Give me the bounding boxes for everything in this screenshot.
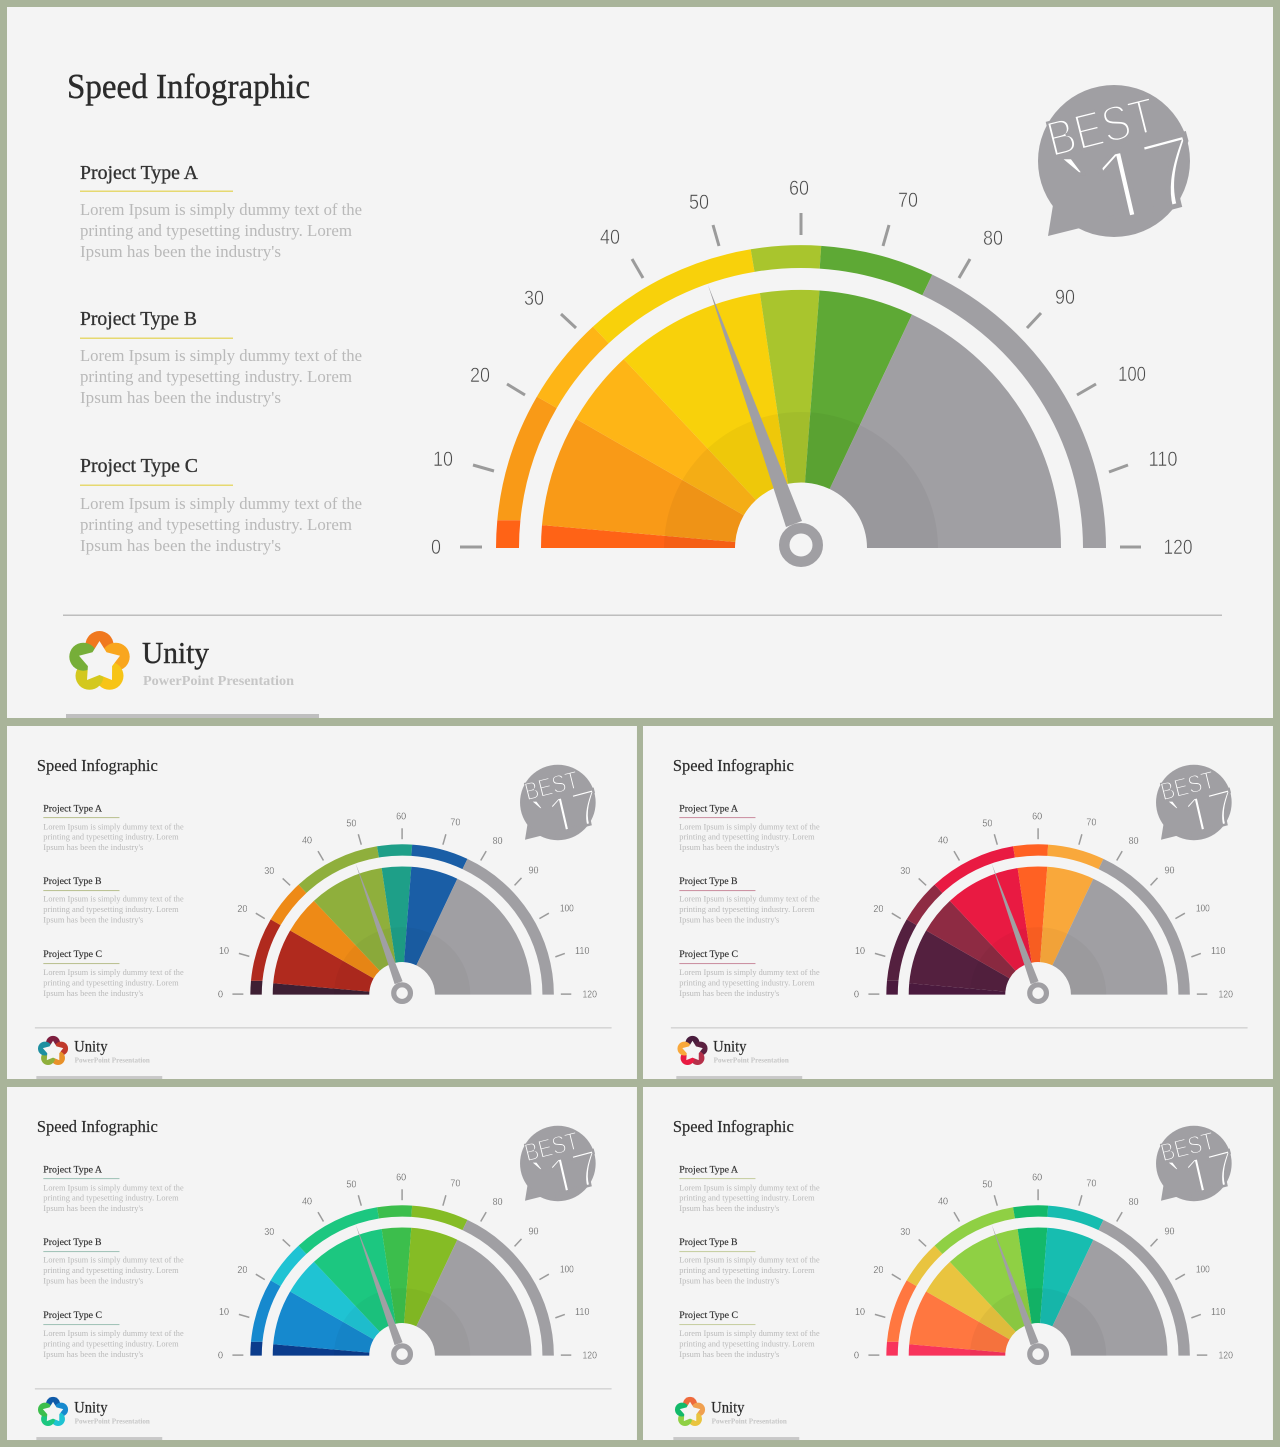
scale numbers: 70 <box>1086 817 1096 828</box>
scale numbers: 50 <box>346 818 356 829</box>
scale numbers: 80 <box>493 836 503 847</box>
text block: Project Type B: Project Type B <box>679 1237 738 1248</box>
text block: Project Type C: Ipsum has been the industry's <box>43 988 143 998</box>
text block: Project Type A: Project Type A <box>679 1164 739 1175</box>
panel: small slide 2 (plum, red, amber) <box>643 726 1273 1079</box>
scale numbers: 10 <box>219 1307 229 1318</box>
text block: Project Type A: Project Type A <box>43 803 103 814</box>
text block: Project Type A: Ipsum has been the industry's <box>43 1203 143 1213</box>
text block: Project Type A: printing and typesetting industry. Lorem <box>679 1193 815 1203</box>
icon: BEST 17 speech bubble <box>1038 85 1212 263</box>
scale numbers: 80 <box>1129 836 1139 847</box>
icon: BEST 17 speech bubble: 1 <box>1178 785 1220 848</box>
text block: Project Type A: Project Type A <box>43 1164 103 1175</box>
text block: Project Type C <box>679 949 820 998</box>
gauge: speedometer <box>218 811 597 1001</box>
scale numbers: 0 <box>218 990 223 1001</box>
scale numbers: 20 <box>470 364 490 387</box>
brand name: Unity <box>74 1039 108 1056</box>
text block: Project Type B: Project Type B <box>43 876 102 887</box>
needle <box>356 1225 410 1362</box>
text block: Project Type C <box>43 949 184 998</box>
scale numbers: 80 <box>493 1197 503 1208</box>
scale numbers: 40 <box>302 836 312 847</box>
text block: Project Type A: Lorem Ipsum is simply dummy text of the <box>679 821 820 831</box>
scale numbers: 30 <box>900 866 910 877</box>
title: Speed Infographic <box>67 67 310 106</box>
text block: Project Type A: Project Type A <box>80 162 199 184</box>
text block: Project Type A: Ipsum has been the industry's <box>679 842 779 852</box>
text block: Project Type A: Ipsum has been the industry's <box>679 1203 779 1213</box>
text block: Project Type B <box>679 876 820 925</box>
text block: Project Type C: Lorem Ipsum is simply dummy text of the <box>43 967 184 977</box>
scale numbers: 100 <box>560 1265 574 1276</box>
logo: Unity star <box>677 1036 708 1065</box>
text block: Project Type C <box>80 455 362 555</box>
logo: Unity star <box>38 1397 68 1426</box>
scale numbers: 110 <box>575 946 590 957</box>
text block: Project Type C: printing and typesetting industry. Lorem <box>80 515 352 534</box>
scale numbers: 20 <box>873 904 884 915</box>
text block: Project Type C: printing and typesetting industry. Lorem <box>679 978 815 988</box>
text block: Project Type B <box>43 1237 184 1286</box>
scale numbers: 90 <box>1164 1226 1175 1237</box>
text block: Project Type A: printing and typesetting industry. Lorem <box>80 221 352 240</box>
scale numbers: 0 <box>854 1351 859 1362</box>
scale numbers: 120 <box>1218 990 1233 1001</box>
text block: Project Type C: printing and typesetting industry. Lorem <box>43 1339 179 1349</box>
text block: Project Type C: Lorem Ipsum is simply dummy text of the <box>679 967 820 977</box>
text block: Project Type A: Ipsum has been the industry's <box>43 842 143 852</box>
scale numbers: 30 <box>264 1227 274 1238</box>
scale numbers <box>431 177 1192 559</box>
text block: Project Type B <box>80 308 362 407</box>
text block: Project Type C <box>679 1310 820 1359</box>
text block: Project Type C: printing and typesetting industry. Lorem <box>679 1339 815 1349</box>
scale numbers: 120 <box>582 1351 597 1362</box>
logo: Unity star <box>675 1397 705 1426</box>
text block: Project Type C: Ipsum has been the industry's <box>679 1349 779 1359</box>
text block: Project Type B: Ipsum has been the industry's <box>43 915 143 925</box>
text block: Project Type C: Ipsum has been the industry's <box>43 1349 143 1359</box>
text block: Project Type B: Lorem Ipsum is simply dummy text of the <box>80 346 362 365</box>
scale numbers <box>854 811 1233 1001</box>
icon: BEST 17 speech bubble <box>1156 765 1243 853</box>
scale numbers: 0 <box>431 536 441 559</box>
text block: Project Type C: Lorem Ipsum is simply dummy text of the <box>43 1328 184 1338</box>
text block: Project Type A: Lorem Ipsum is simply dummy text of the <box>679 1182 820 1192</box>
scale numbers: 110 <box>1211 1307 1226 1318</box>
text block: Project Type C: Lorem Ipsum is simply dummy text of the <box>679 1328 820 1338</box>
icon: BEST 17 speech bubble: ` <box>1164 792 1183 853</box>
brand tagline: PowerPoint Presentation <box>712 1418 787 1426</box>
text block: Project Type B: Lorem Ipsum is simply dummy text of the <box>679 1255 820 1265</box>
icon: BEST 17 speech bubble: 1 <box>542 1146 584 1209</box>
text block: Project Type A: printing and typesetting industry. Lorem <box>43 1193 179 1203</box>
icon: BEST 17 speech bubble: BEST <box>1041 87 1161 168</box>
scale numbers: 90 <box>528 865 539 876</box>
brand tagline: PowerPoint Presentation <box>714 1057 789 1065</box>
outer ring segments <box>250 1205 554 1356</box>
brand tagline: PowerPoint Presentation <box>75 1057 150 1065</box>
scale numbers: 70 <box>450 817 460 828</box>
icon: BEST 17 speech bubble <box>1156 1126 1243 1214</box>
text block: Project Type B: printing and typesetting industry. Lorem <box>80 367 352 386</box>
inner fan segments <box>909 1227 1167 1356</box>
text block: Project Type C <box>43 1310 184 1359</box>
scale numbers: 100 <box>1118 363 1146 386</box>
inner fan segments <box>541 290 1061 548</box>
scale numbers: 50 <box>346 1179 356 1190</box>
scale ticks <box>232 828 571 994</box>
text block: Project Type B: Lorem Ipsum is simply dummy text of the <box>679 894 820 904</box>
scale numbers: 110 <box>575 1307 590 1318</box>
needle <box>708 285 818 562</box>
scale numbers: 60 <box>1032 811 1042 822</box>
scale numbers: 40 <box>938 1197 948 1208</box>
scale numbers: 10 <box>433 448 453 471</box>
text block: Project Type B: Ipsum has been the industry's <box>679 915 779 925</box>
inner fan segments <box>909 866 1167 995</box>
scale numbers: 120 <box>1164 536 1192 559</box>
scale numbers: 70 <box>898 189 918 212</box>
title: Speed Infographic <box>673 756 794 775</box>
text block: Project Type B: Ipsum has been the industry's <box>43 1276 143 1286</box>
text block: Project Type B: Lorem Ipsum is simply dummy text of the <box>43 894 184 904</box>
text block: Project Type B: printing and typesetting industry. Lorem <box>43 1265 179 1275</box>
brand name: Unity <box>142 635 209 670</box>
needle <box>992 864 1046 1001</box>
brand name: Unity <box>711 1400 745 1417</box>
text block: Project Type C: Project Type C <box>43 1310 102 1321</box>
text block: Project Type B: printing and typesetting industry. Lorem <box>43 904 179 914</box>
gauge: speedometer <box>854 1172 1233 1362</box>
scale numbers: 110 <box>1211 946 1226 957</box>
outer ring segments <box>250 844 554 995</box>
inner fan segments <box>273 1227 531 1356</box>
gauge: speedometer <box>218 1172 597 1362</box>
scale numbers: 110 <box>1148 448 1178 471</box>
icon: BEST 17 speech bubble: BEST <box>522 1128 582 1167</box>
scale numbers: 40 <box>302 1197 312 1208</box>
scale numbers: 10 <box>219 946 229 957</box>
scale numbers: 50 <box>982 1179 992 1190</box>
scale numbers: 20 <box>237 1265 248 1276</box>
scale numbers <box>218 811 597 1001</box>
scale numbers: 80 <box>1129 1197 1139 1208</box>
scale numbers: 90 <box>1055 286 1075 309</box>
scale numbers: 60 <box>1032 1172 1042 1183</box>
text block: Project Type C: Project Type C <box>43 949 102 960</box>
text block: Project Type A: Lorem Ipsum is simply dummy text of the <box>80 200 362 219</box>
text block: Project Type C: Lorem Ipsum is simply dummy text of the <box>80 494 362 513</box>
text block: Project Type C: Project Type C <box>679 949 738 960</box>
text block: Project Type A: printing and typesetting industry. Lorem <box>43 832 179 842</box>
title: Speed Infographic <box>37 756 158 775</box>
text block: Project Type B: Project Type B <box>679 876 738 887</box>
outer ring segments <box>886 844 1190 995</box>
icon: BEST 17 speech bubble: ` <box>1164 1153 1183 1214</box>
scale numbers: 80 <box>983 227 1003 250</box>
icon: BEST 17 speech bubble: ` <box>528 1153 547 1214</box>
scale numbers: 120 <box>1218 1351 1233 1362</box>
scale numbers: 50 <box>982 818 992 829</box>
icon: BEST 17 speech bubble: ` <box>528 792 547 853</box>
logo: Unity star <box>69 631 130 690</box>
scale numbers: 50 <box>689 191 709 214</box>
icon: BEST 17 speech bubble: BEST <box>522 767 582 806</box>
text block: Project Type B <box>679 1237 820 1286</box>
scale numbers <box>854 1172 1233 1362</box>
brand tagline: PowerPoint Presentation <box>75 1418 150 1426</box>
text block: Project Type C: Ipsum has been the industry's <box>679 988 779 998</box>
text block: Project Type A <box>679 1164 820 1213</box>
scale numbers: 70 <box>450 1178 460 1189</box>
scale numbers: 40 <box>938 836 948 847</box>
gauge: speedometer <box>431 177 1192 562</box>
panel: small slide 3 (blue, green, lime) <box>7 1087 637 1440</box>
icon: BEST 17 speech bubble: 1 <box>542 785 584 848</box>
inner fan segments <box>273 866 531 995</box>
text block: Project Type C: Project Type C <box>80 455 198 477</box>
scale numbers: 20 <box>237 904 248 915</box>
scale numbers: 30 <box>524 287 544 310</box>
text block: Project Type B: printing and typesetting industry. Lorem <box>679 904 815 914</box>
panel: main speedometer slide (orange) <box>7 7 1273 718</box>
panel: small slide 4 (pink, green, teal) <box>643 1087 1273 1440</box>
text block: Project Type A: Lorem Ipsum is simply dummy text of the <box>43 1182 184 1192</box>
scale ticks <box>460 213 1141 547</box>
text block: Project Type B: Ipsum has been the industry's <box>679 1276 779 1286</box>
scale numbers: 60 <box>396 1172 406 1183</box>
icon: BEST 17 speech bubble: 7 <box>566 779 607 838</box>
icon: BEST 17 speech bubble <box>520 1126 607 1214</box>
text block: Project Type C: printing and typesetting industry. Lorem <box>43 978 179 988</box>
brand name: Unity <box>74 1400 108 1417</box>
scale numbers: 40 <box>600 226 620 249</box>
logo: Unity star <box>38 1036 68 1065</box>
scale numbers: 30 <box>264 866 274 877</box>
scale ticks <box>232 1189 571 1355</box>
title: Speed Infographic <box>673 1117 794 1136</box>
icon: BEST 17 speech bubble <box>520 765 607 853</box>
brand tagline: PowerPoint Presentation <box>143 674 294 689</box>
scale ticks <box>868 828 1207 994</box>
icon: BEST 17 speech bubble: 7 <box>1202 1140 1243 1199</box>
icon: BEST 17 speech bubble: BEST <box>1158 1128 1218 1167</box>
scale numbers: 60 <box>396 811 406 822</box>
scale numbers: 10 <box>855 946 865 957</box>
icon: BEST 17 speech bubble: 7 <box>566 1140 607 1199</box>
scale numbers: 0 <box>218 1351 223 1362</box>
text block: Project Type B: Lorem Ipsum is simply dummy text of the <box>43 1255 184 1265</box>
brand name: Unity <box>713 1039 747 1056</box>
scale numbers: 100 <box>1196 904 1210 915</box>
text block: Project Type B: Ipsum has been the industry's <box>80 388 281 407</box>
text block: Project Type A: Project Type A <box>679 803 739 814</box>
scale numbers: 70 <box>1086 1178 1096 1189</box>
text block: Project Type B <box>43 876 184 925</box>
text block: Project Type A: Ipsum has been the industry's <box>80 242 281 261</box>
icon: BEST 17 speech bubble: BEST <box>1158 767 1218 806</box>
text block: Project Type A <box>43 1164 184 1213</box>
text block: Project Type A <box>80 162 362 261</box>
text block: Project Type B: Project Type B <box>80 308 197 330</box>
scale numbers: 100 <box>1196 1265 1210 1276</box>
scale numbers: 100 <box>560 904 574 915</box>
outer ring segments <box>496 245 1106 548</box>
scale numbers <box>218 1172 597 1362</box>
text block: Project Type C: Project Type C <box>679 1310 738 1321</box>
title: Speed Infographic <box>37 1117 158 1136</box>
scale numbers: 60 <box>789 177 809 200</box>
text block: Project Type B: Project Type B <box>43 1237 102 1248</box>
icon: BEST 17 speech bubble: 1 <box>1178 1146 1220 1209</box>
text block: Project Type B: printing and typesetting industry. Lorem <box>679 1265 815 1275</box>
scale ticks <box>868 1189 1207 1355</box>
scale numbers: 30 <box>900 1227 910 1238</box>
text block: Project Type A <box>679 803 820 852</box>
icon: BEST 17 speech bubble: 7 <box>1202 779 1243 838</box>
scale numbers: 0 <box>854 990 859 1001</box>
scale numbers: 120 <box>582 990 597 1001</box>
gauge: speedometer <box>854 811 1233 1001</box>
text block: Project Type A: Lorem Ipsum is simply dummy text of the <box>43 821 184 831</box>
needle <box>992 1225 1046 1362</box>
text block: Project Type C: Ipsum has been the industry's <box>80 536 281 555</box>
needle <box>356 864 410 1001</box>
outer ring segments <box>886 1205 1190 1356</box>
scale numbers: 90 <box>528 1226 539 1237</box>
icon: BEST 17 speech bubble: 7 <box>1131 112 1212 232</box>
scale numbers: 90 <box>1164 865 1175 876</box>
text block: Project Type A <box>43 803 184 852</box>
scale numbers: 20 <box>873 1265 884 1276</box>
scale numbers: 10 <box>855 1307 865 1318</box>
panel: small slide 1 (red, green, blue) <box>7 726 637 1079</box>
icon: BEST 17 speech bubble: ` <box>1055 140 1092 263</box>
text block: Project Type A: printing and typesetting industry. Lorem <box>679 832 815 842</box>
icon: BEST 17 speech bubble: 1 <box>1082 124 1166 251</box>
